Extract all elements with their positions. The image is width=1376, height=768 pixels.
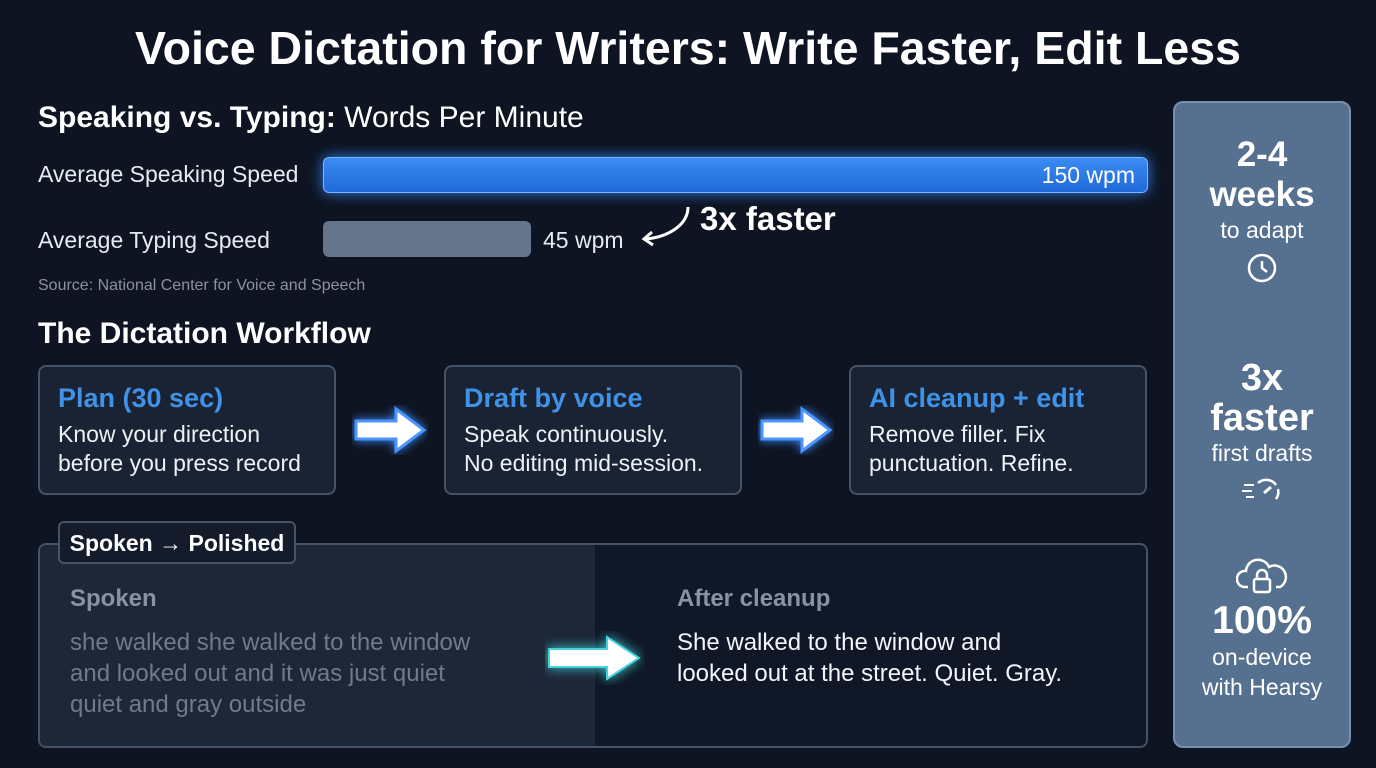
- panel: spoken vs polished: [38, 543, 1148, 748]
- stat: weeks: to adapt: [1220, 217, 1304, 243]
- spoken text: quiet and gray outside: [70, 691, 306, 718]
- arrow: 3x faster callout: [642, 207, 690, 246]
- arrow 2: [758, 405, 834, 455]
- cleaned text: looked out at the street. Quiet. Gray.: [677, 660, 1062, 687]
- cleaned text: After cleanup: [677, 585, 830, 612]
- stat: on-device: [1202, 558, 1322, 700]
- spoken text: Spoken: [70, 585, 157, 612]
- card: draft: No editing mid-session.: [464, 450, 703, 476]
- spoken text: [70, 585, 470, 718]
- card: draft: Speak continuously.: [464, 421, 668, 447]
- card: draft: Draft by voice: [464, 383, 643, 413]
- spoken text: and looked out and it was just quiet: [70, 660, 445, 687]
- stat: on-device: with Hearsy: [1202, 674, 1322, 700]
- bar: speaking: 150 wpm: [1042, 162, 1135, 188]
- workflow heading: The Dictation Workflow: [38, 317, 371, 350]
- stat: on-device: 100%: [1212, 599, 1312, 642]
- tab label: [58, 521, 296, 564]
- stat: weeks: 2-4: [1237, 135, 1287, 174]
- arrow: glow: [545, 631, 645, 685]
- bar chart: 45 wpm: [543, 227, 624, 253]
- spoken text: she walked she walked to the window: [70, 629, 470, 656]
- stat: faster: 3x: [1241, 357, 1283, 399]
- card: plan: Know your direction before you press record: [58, 421, 301, 476]
- stat: weeks: weeks: [1209, 175, 1315, 214]
- bar: typing: [323, 221, 531, 257]
- label: speaking: Average Speaking Speed: [38, 161, 298, 187]
- card: cleanup: Remove filler. Fix punctuation. Refine.: [869, 421, 1074, 476]
- label: typing: Average Typing Speed: [38, 227, 270, 253]
- title: Voice Dictation for Writers: Write Faster, Edit Less: [135, 22, 1241, 74]
- card: cleanup: AI cleanup + edit: [869, 383, 1084, 413]
- stat: on-device: on-device: [1212, 644, 1312, 670]
- cleaned text: She walked to the window and: [677, 629, 1001, 656]
- callout: 3x faster: 3x faster: [700, 200, 836, 237]
- icon: speedometer: [1242, 478, 1280, 500]
- stat: faster: [1210, 357, 1314, 500]
- bar chart: [38, 146, 1159, 257]
- card: draft: [444, 365, 742, 495]
- card: cleanup: [849, 365, 1147, 495]
- chart heading: Speaking vs. Typing: Words Per Minute: [38, 101, 584, 134]
- card: plan: [38, 365, 336, 495]
- icon: clock: [1248, 254, 1276, 282]
- tab label: Spoken → Polished: [70, 530, 284, 556]
- icon: cloud lock: [1236, 558, 1288, 594]
- arrow 1: [352, 405, 428, 455]
- bar: speaking: [323, 157, 1148, 193]
- cleaned text: [677, 585, 1062, 687]
- source note: Source: National Center for Voice and Speech: [38, 277, 365, 294]
- panel: stats sidebar: [1173, 101, 1351, 748]
- stat: faster: first drafts: [1212, 440, 1312, 466]
- stat: weeks: [1209, 135, 1315, 282]
- stat: faster: faster: [1210, 397, 1314, 439]
- card: plan: Plan (30 sec): [58, 383, 223, 413]
